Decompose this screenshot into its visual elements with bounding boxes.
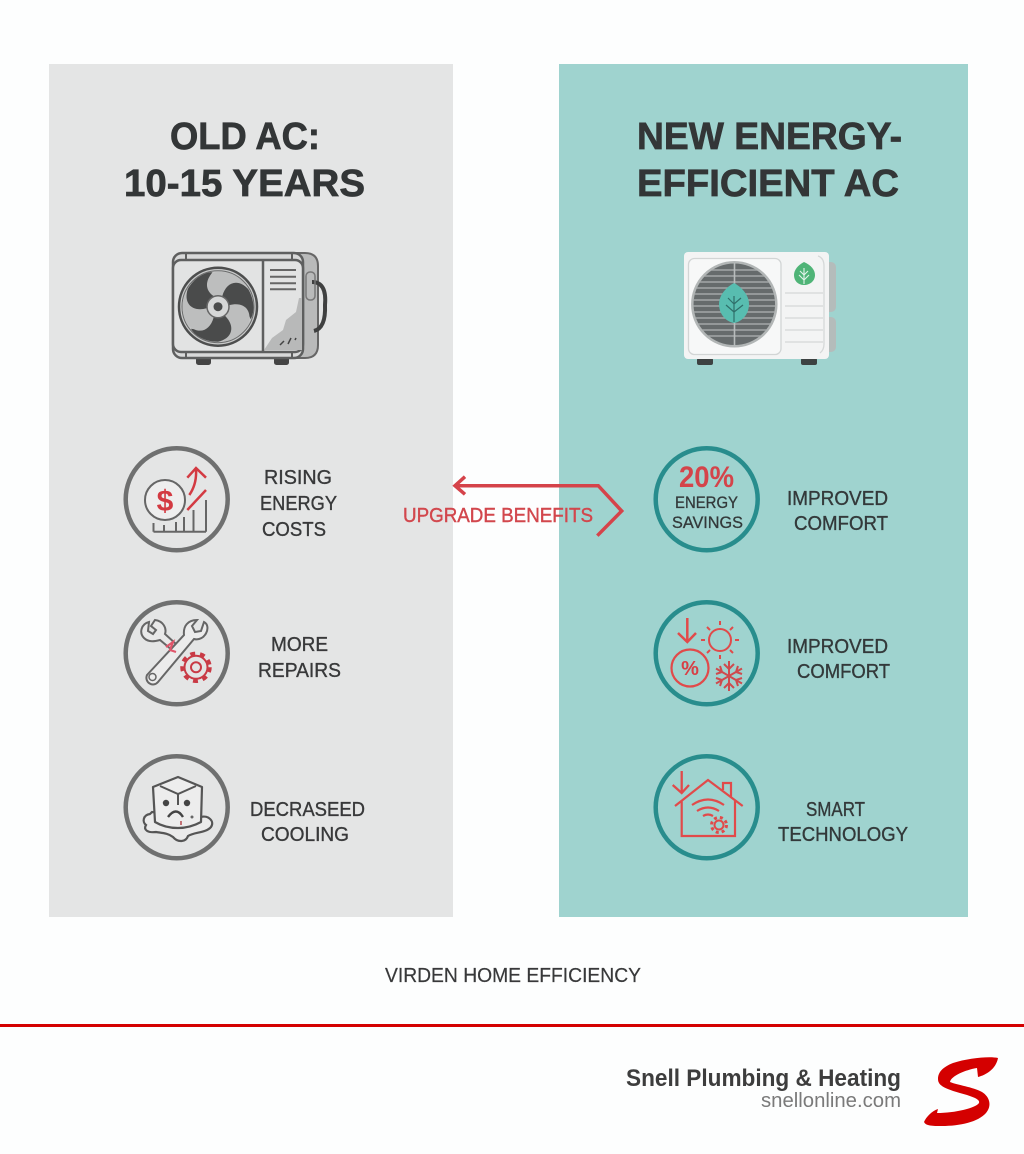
icon: old outdoor AC unit	[173, 253, 325, 365]
heading: new AC: NEW ENERGY-	[637, 116, 902, 158]
label: rising energy costs: COSTS	[262, 519, 326, 541]
label: improved comfort: IMPROVED	[787, 488, 888, 510]
panel: new AC	[559, 64, 968, 917]
footer brand: snellonline.com	[761, 1090, 901, 1112]
arrow: upgrade benefits	[403, 477, 622, 536]
heading: old AC: 10-15 YEARS	[124, 163, 365, 205]
label: rising energy costs: ENERGY	[260, 493, 337, 515]
icon: melting ice cube	[126, 756, 228, 858]
label: more repairs: MORE	[271, 634, 328, 656]
label: rising energy costs	[260, 467, 337, 541]
icon: 20% energy savings: 20%	[679, 461, 734, 494]
heading: old AC	[124, 116, 365, 205]
icon: Snell S logo	[924, 1057, 998, 1126]
label: improved comfort: COMFORT	[794, 513, 888, 535]
label: decreased cooling: DECRASEED	[250, 799, 365, 821]
footer brand	[626, 1057, 998, 1126]
label: smart technology: SMART	[806, 799, 865, 821]
label: improved comfort	[787, 636, 890, 683]
label: decreased cooling	[250, 799, 365, 846]
icon: new outdoor AC unit	[684, 252, 836, 365]
heading: new AC: EFFICIENT AC	[637, 163, 899, 205]
label: more repairs: REPAIRS	[258, 660, 341, 682]
label: more repairs	[258, 634, 341, 682]
label: smart technology: TECHNOLOGY	[778, 824, 908, 846]
icon: 20% energy savings: SAVINGS	[672, 513, 743, 532]
label: improved comfort: IMPROVED	[787, 636, 888, 658]
footer rule	[0, 1024, 1024, 1027]
caption: VIRDEN HOME EFFICIENCY	[385, 965, 641, 987]
label: improved comfort	[787, 488, 888, 535]
icon: rising energy costs	[126, 448, 228, 550]
label: smart technology	[778, 799, 908, 846]
icon: 20% energy savings	[656, 448, 758, 550]
label: improved comfort: COMFORT	[797, 661, 890, 683]
icon: rising energy costs: $	[157, 485, 174, 518]
label: upgrade benefits: UPGRADE BENEFITS	[403, 505, 593, 527]
icon: smart home	[656, 756, 758, 858]
panel: old AC	[49, 64, 453, 917]
footer brand: Snell Plumbing & Heating	[626, 1065, 901, 1092]
icon: more repairs	[126, 602, 228, 704]
heading: new AC	[637, 116, 902, 205]
label: rising energy costs: RISING	[264, 467, 332, 489]
icon: 20% energy savings: ENERGY	[675, 493, 738, 512]
heading: old AC: OLD AC:	[170, 116, 320, 158]
icon: lower percent, sun and snowflake: %	[681, 658, 699, 680]
icon: lower percent, sun and snowflake	[656, 602, 758, 704]
label: decreased cooling: COOLING	[261, 824, 349, 846]
